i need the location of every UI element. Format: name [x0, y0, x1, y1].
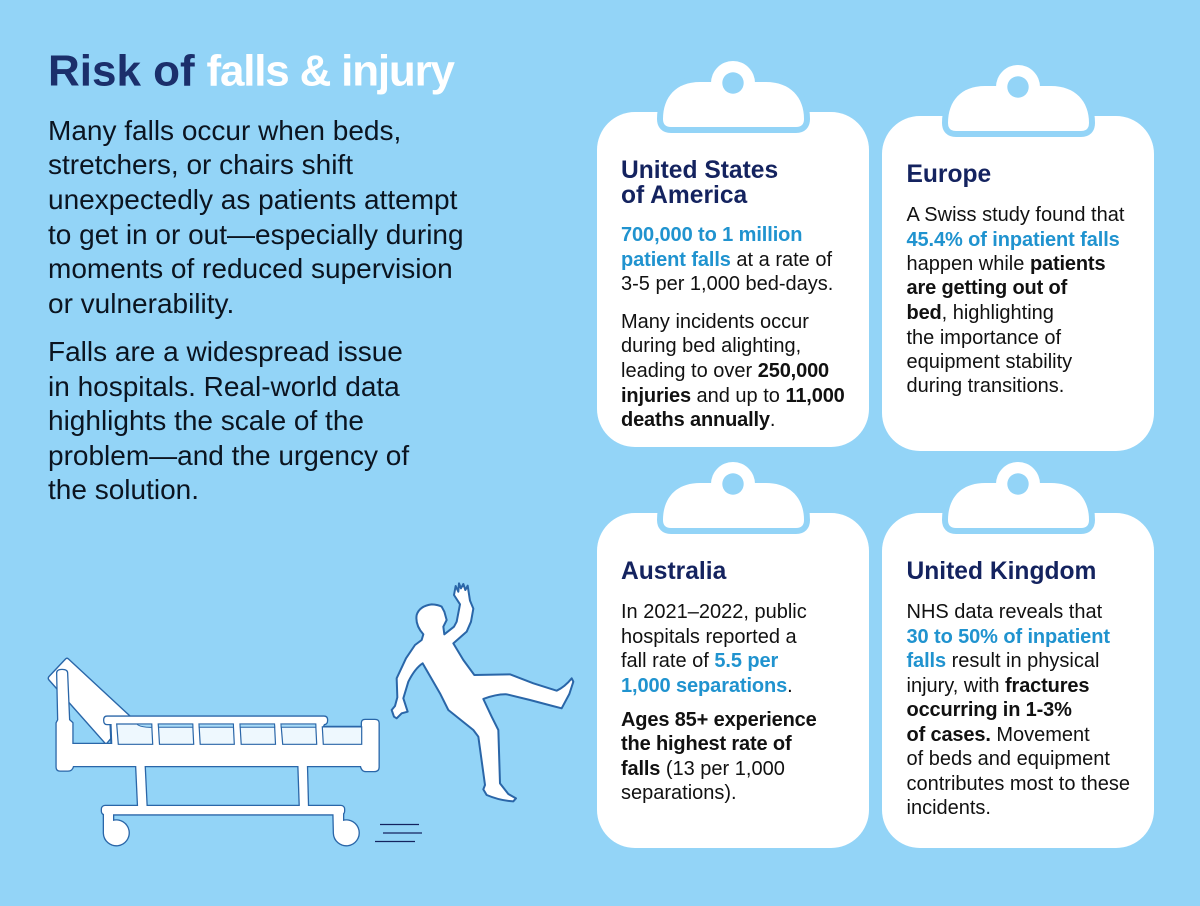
second text block [48, 336, 409, 505]
panel: Europe: during transitions. [906, 375, 1064, 397]
panel: United States of America: United States [621, 157, 778, 184]
panel: Australia: Ages 85+ experience [621, 709, 817, 731]
panel: United Kingdom: occurring in 1-3% [906, 699, 1072, 721]
panel: United States of America: 700,000 to 1 million [621, 224, 802, 246]
illustration: hospital bed [48, 658, 378, 845]
title: Risk of [48, 46, 195, 96]
panel: Europe: happen while patients [906, 253, 1105, 275]
panel: Australia: fall rate of 5.5 per [621, 650, 778, 672]
panel: Australia: falls (13 per 1,000 [621, 758, 785, 780]
second text block: Falls are a widespread issue [48, 336, 403, 367]
panel: United Kingdom: falls result in physical [906, 650, 1099, 672]
title: falls & injury [206, 46, 455, 96]
panel: United Kingdom: 30 to 50% of inpatient [906, 626, 1110, 648]
panel: Australia: 1,000 separations. [621, 675, 793, 697]
clipboard: United States [597, 61, 869, 447]
intro text block: or vulnerability. [48, 288, 234, 319]
intro text block: moments of reduced supervision [48, 253, 453, 284]
panel: United Kingdom: of beds and equipment [906, 748, 1110, 770]
title [48, 46, 455, 96]
panel: United Kingdom: NHS data reveals that [906, 601, 1103, 623]
clipboard: Australia [597, 462, 869, 848]
second text block: in hospitals. Real-world data [48, 371, 400, 402]
panel: United States of America: during bed alighting, [621, 335, 801, 357]
intro text block: stretchers, or chairs shift [48, 149, 353, 180]
panel: United States of America [597, 61, 869, 447]
panel: Europe: are getting out of [906, 277, 1068, 299]
icon: motion lines [375, 824, 422, 842]
intro text block [48, 115, 464, 319]
panel: Australia: Australia [621, 558, 727, 585]
panel: United Kingdom: injury, with fractures [906, 675, 1089, 697]
panel: Australia [597, 462, 869, 848]
panel: United Kingdom: of cases. Movement [906, 724, 1090, 746]
second text block: problem—and the urgency of [48, 440, 409, 471]
panel: United States of America: deaths annually. [621, 409, 775, 431]
clipboard: United Kingdom [882, 462, 1154, 848]
panel: Europe: Europe [906, 161, 991, 188]
panel: United States of America: 3-5 per 1,000 bed-days. [621, 273, 833, 295]
panel: United States of America: of America [621, 182, 748, 209]
panel: Europe [882, 65, 1154, 451]
panel: United States of America: injuries and up to 11,000 [621, 385, 845, 407]
panel: United States of America: Many incidents occur [621, 311, 809, 333]
panel: Australia: In 2021–2022, public [621, 601, 807, 623]
panel: United Kingdom: incidents. [906, 797, 991, 819]
clipboard: Europe [882, 65, 1154, 451]
panel: Australia: the highest rate of [621, 733, 792, 755]
panel: Europe: A Swiss study found that [906, 204, 1125, 226]
panel: Europe: the importance of [906, 327, 1061, 349]
panel: United States of America: leading to over 250,000 [621, 360, 829, 382]
illustration: falling man [392, 583, 573, 801]
panel: Australia: separations). [621, 782, 737, 804]
panel: United Kingdom: United Kingdom [906, 558, 1096, 585]
panel: Europe: equipment stability [906, 351, 1072, 373]
second text block: highlights the scale of the [48, 405, 364, 436]
panel: United Kingdom: contributes most to these [906, 773, 1130, 795]
panel: Europe: bed, highlighting [906, 302, 1054, 324]
panel: Australia: hospitals reported a [621, 626, 798, 648]
intro text block: to get in or out—especially during [48, 219, 464, 250]
panel: Europe: 45.4% of inpatient falls [906, 229, 1120, 251]
intro text block: unexpectedly as patients attempt [48, 184, 458, 215]
second text block: the solution. [48, 474, 199, 505]
panel: United States of America: patient falls at a rate of [621, 249, 832, 271]
panel: United Kingdom [882, 462, 1154, 848]
intro text block: Many falls occur when beds, [48, 115, 401, 146]
